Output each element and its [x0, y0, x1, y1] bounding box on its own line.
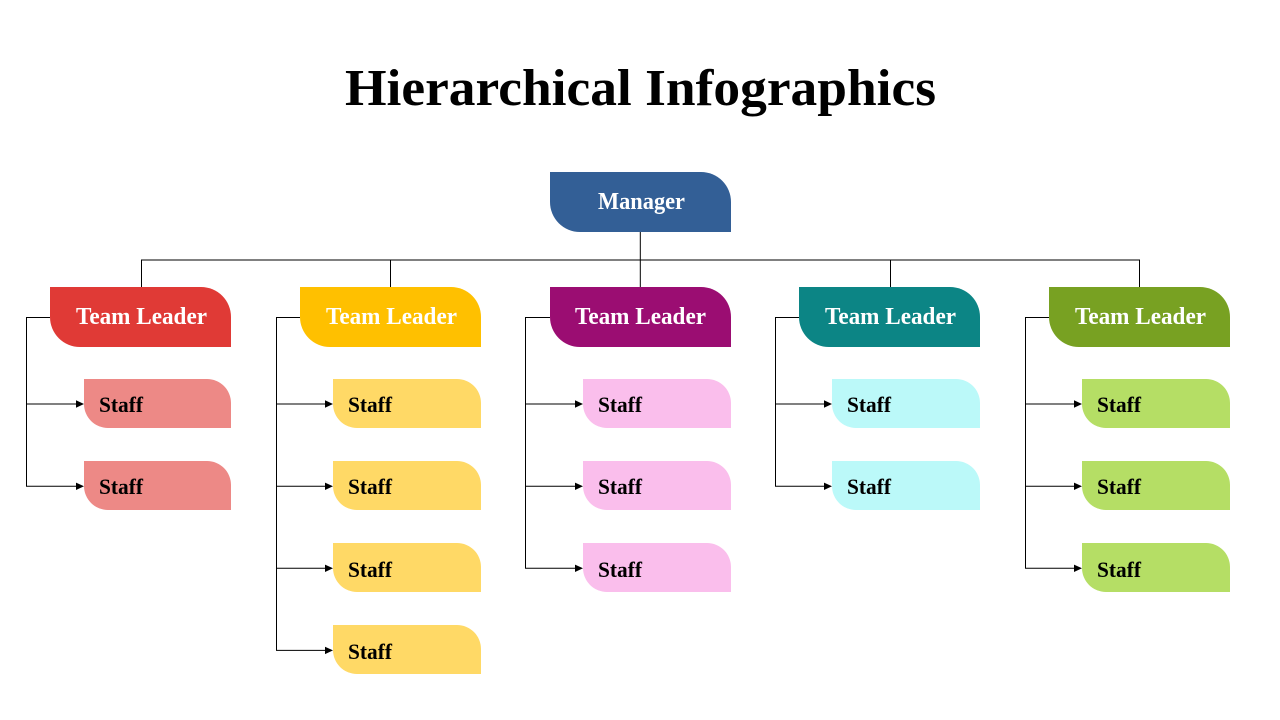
staff: teal 2	[832, 461, 980, 510]
team leader: teal: Team Leader	[825, 304, 956, 330]
team leader: red: Team Leader	[76, 304, 207, 330]
staff: green 2	[1082, 461, 1230, 510]
manager box	[550, 172, 731, 232]
column: yellow team	[276, 287, 481, 674]
staff: purple 3	[583, 543, 731, 592]
column: green team	[1026, 287, 1230, 592]
staff: yellow 2: Staff	[348, 474, 393, 499]
column: teal team	[776, 287, 980, 510]
connector: teal team	[776, 318, 832, 490]
staff: purple 1: Staff	[598, 392, 643, 417]
staff: yellow 4: Staff	[348, 639, 393, 664]
title: Hierarchical Infographics	[345, 60, 936, 117]
team leader: green	[1049, 287, 1230, 347]
staff: purple 2	[583, 461, 731, 510]
staff: teal 1	[832, 379, 980, 428]
column: red team	[26, 287, 231, 510]
connector: green team	[1026, 318, 1082, 572]
staff: yellow 1: Staff	[348, 392, 393, 417]
column: purple team	[526, 287, 731, 592]
staff: red 2: Staff	[99, 474, 144, 499]
team leader: yellow: Team Leader	[326, 304, 457, 330]
staff: red 1	[84, 379, 231, 428]
connector: manager to team leaders	[142, 232, 1140, 287]
connector: purple team	[526, 318, 583, 572]
staff: yellow 2	[333, 461, 481, 510]
staff: teal 1: Staff	[847, 392, 892, 417]
staff: red 1: Staff	[99, 392, 144, 417]
staff: red 2	[84, 461, 231, 510]
connector: red team	[26, 318, 84, 490]
team leader: green: Team Leader	[1075, 304, 1206, 330]
staff: purple 1	[583, 379, 731, 428]
staff: yellow 1	[333, 379, 481, 428]
team leader: yellow	[300, 287, 481, 347]
manager box: Manager	[598, 189, 685, 215]
staff: green 3: Staff	[1097, 557, 1142, 582]
staff: green 3	[1082, 543, 1230, 592]
team leader: purple: Team Leader	[575, 304, 706, 330]
staff: green 2: Staff	[1097, 474, 1142, 499]
staff: green 1	[1082, 379, 1230, 428]
staff: green 1: Staff	[1097, 392, 1142, 417]
staff: teal 2: Staff	[847, 474, 892, 499]
connector: yellow team	[276, 318, 333, 654]
staff: purple 3: Staff	[598, 557, 643, 582]
team leader: red	[50, 287, 231, 347]
team leader: teal	[799, 287, 980, 347]
staff: yellow 3: Staff	[348, 557, 393, 582]
staff: yellow 4	[333, 625, 481, 674]
staff: yellow 3	[333, 543, 481, 592]
team leader: purple	[550, 287, 731, 347]
staff: purple 2: Staff	[598, 474, 643, 499]
